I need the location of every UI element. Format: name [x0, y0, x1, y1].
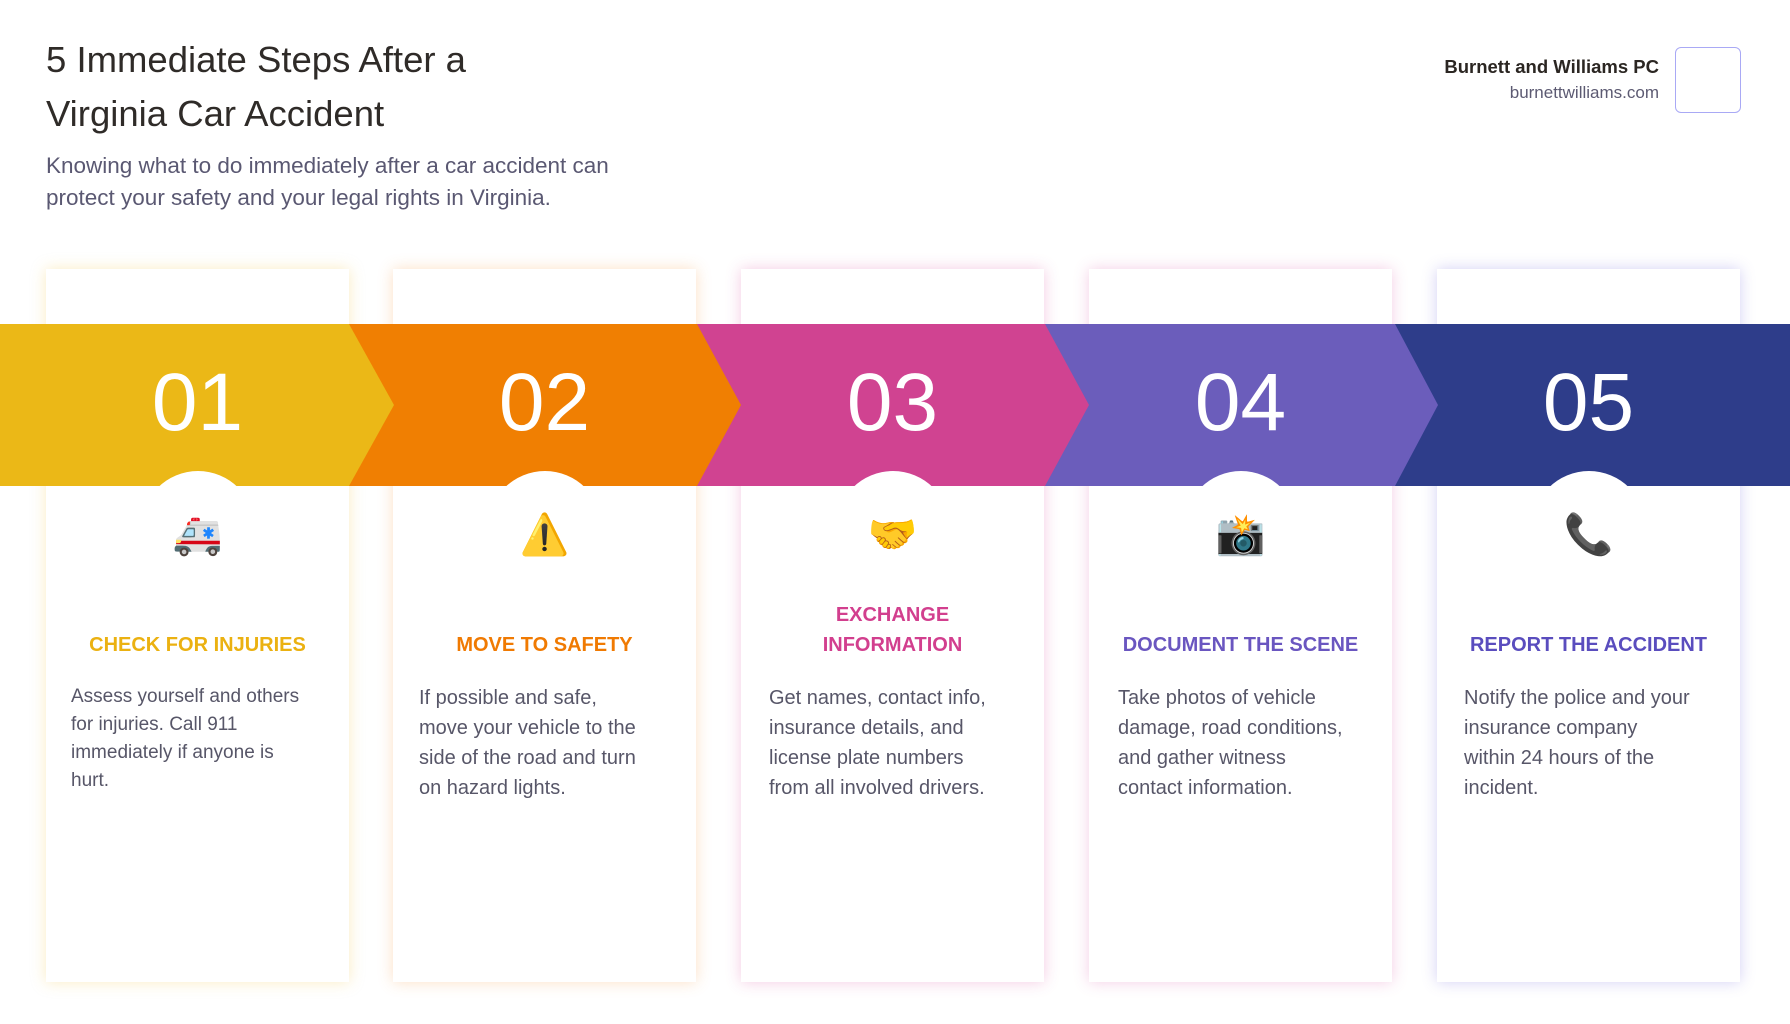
text 3	[769, 687, 986, 799]
brand: burnettwilliams.com	[1510, 83, 1659, 102]
text 1: for injuries. Call 911	[71, 714, 238, 735]
text: 02	[499, 357, 590, 448]
card 2	[393, 269, 696, 982]
text: 05	[1543, 357, 1634, 448]
text: 04	[1195, 357, 1286, 448]
logo box	[1675, 47, 1741, 113]
text 3: from all involved drivers.	[769, 777, 985, 799]
brand	[1444, 56, 1659, 102]
subtitle: protect your safety and your legal rights in Virginia.	[46, 185, 551, 210]
title	[46, 39, 466, 134]
icon: ambulance: 🚑	[173, 513, 222, 557]
brand: Burnett and Williams PC	[1444, 56, 1659, 77]
text 3: license plate numbers	[769, 747, 964, 769]
text 4: damage, road conditions,	[1118, 717, 1343, 739]
text 3: Get names, contact info,	[769, 687, 986, 709]
numbers: 01	[152, 357, 243, 448]
text 2: side of the road and turn	[419, 747, 636, 769]
text 5: Notify the police and your	[1464, 687, 1690, 709]
text 1	[71, 686, 299, 791]
title: Virginia Car Accident	[46, 93, 384, 134]
text 1: hurt.	[71, 770, 109, 791]
heading 2: MOVE TO SAFETY	[456, 634, 633, 656]
heading 3: INFORMATION	[823, 634, 962, 656]
heading 5: REPORT THE ACCIDENT	[1470, 634, 1707, 656]
text 2	[419, 687, 636, 799]
text 5: within 24 hours of the	[1464, 747, 1654, 769]
text 5	[1464, 687, 1690, 799]
card 4	[1089, 269, 1392, 982]
text 4: Take photos of vehicle	[1118, 687, 1316, 709]
chevron band	[0, 324, 1790, 486]
icon: warning: ⚠️	[520, 513, 569, 557]
heading 3	[823, 604, 962, 656]
text 3: insurance details, and	[769, 717, 964, 739]
text 4: contact information.	[1118, 777, 1293, 799]
icon circles	[141, 471, 255, 585]
text 1: Assess yourself and others	[71, 686, 299, 707]
icon: camera: 📸	[1216, 513, 1265, 557]
heading 1: CHECK FOR INJURIES	[89, 634, 306, 656]
text 5: insurance company	[1464, 717, 1637, 739]
card 3	[741, 269, 1044, 982]
subtitle	[46, 153, 609, 210]
text 1: immediately if anyone is	[71, 742, 274, 763]
text: 03	[847, 357, 938, 448]
text 5: incident.	[1464, 777, 1538, 799]
text 4: and gather witness	[1118, 747, 1286, 769]
text 2: on hazard lights.	[419, 777, 566, 799]
icon: handshake: 🤝	[868, 513, 917, 557]
title: 5 Immediate Steps After a	[46, 39, 466, 80]
text 4	[1118, 687, 1343, 799]
card 1	[46, 269, 349, 982]
subtitle: Knowing what to do immediately after a car accident can	[46, 153, 609, 178]
heading 3: EXCHANGE	[836, 604, 949, 626]
heading 4: DOCUMENT THE SCENE	[1123, 634, 1358, 656]
text 2: move your vehicle to the	[419, 717, 636, 739]
text 2: If possible and safe,	[419, 687, 597, 709]
card 5	[1437, 269, 1740, 982]
icon: phone: 📞	[1564, 513, 1613, 557]
